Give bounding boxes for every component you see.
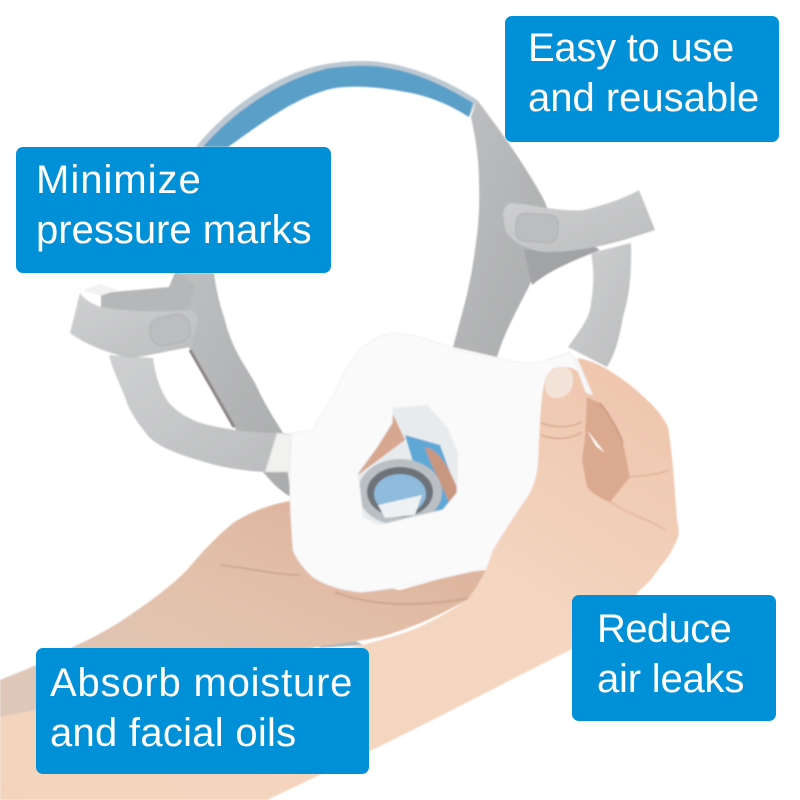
callout: absorb moisture and facial oils	[36, 648, 369, 774]
callout: easy to use and reusable: Easy to use	[528, 26, 734, 70]
callout: reduce air leaks: air leaks	[597, 657, 744, 701]
folded liner corner	[570, 352, 593, 395]
mask view through liner hole	[358, 406, 458, 524]
right hand and forearm	[0, 352, 679, 800]
callout: absorb moisture and facial oils: and facial oils	[50, 711, 296, 755]
thumb creases	[541, 422, 582, 438]
callout: easy to use and reusable: and reusable	[528, 76, 759, 120]
fingernail	[545, 367, 573, 398]
headgear top blue band	[196, 61, 477, 147]
white fabric liner	[290, 333, 600, 592]
fingers shadow	[582, 397, 630, 502]
callout: reduce air leaks	[572, 595, 776, 721]
photo illustration: mask and hands	[0, 60, 679, 800]
strap piece below hands	[318, 638, 363, 648]
headgear right strap	[453, 100, 655, 367]
left supporting hand and forearm	[0, 500, 492, 720]
callout: minimize pressure marks: pressure marks	[36, 208, 312, 252]
callout: absorb moisture and facial oils: Absorb moisture	[50, 661, 353, 705]
headgear left strap	[70, 270, 291, 497]
strap clip	[265, 433, 295, 472]
callout: easy to use and reusable	[505, 16, 779, 142]
callout: minimize pressure marks	[16, 147, 331, 273]
callout: reduce air leaks: Reduce	[597, 607, 731, 651]
callout: minimize pressure marks: Minimize	[36, 158, 202, 202]
